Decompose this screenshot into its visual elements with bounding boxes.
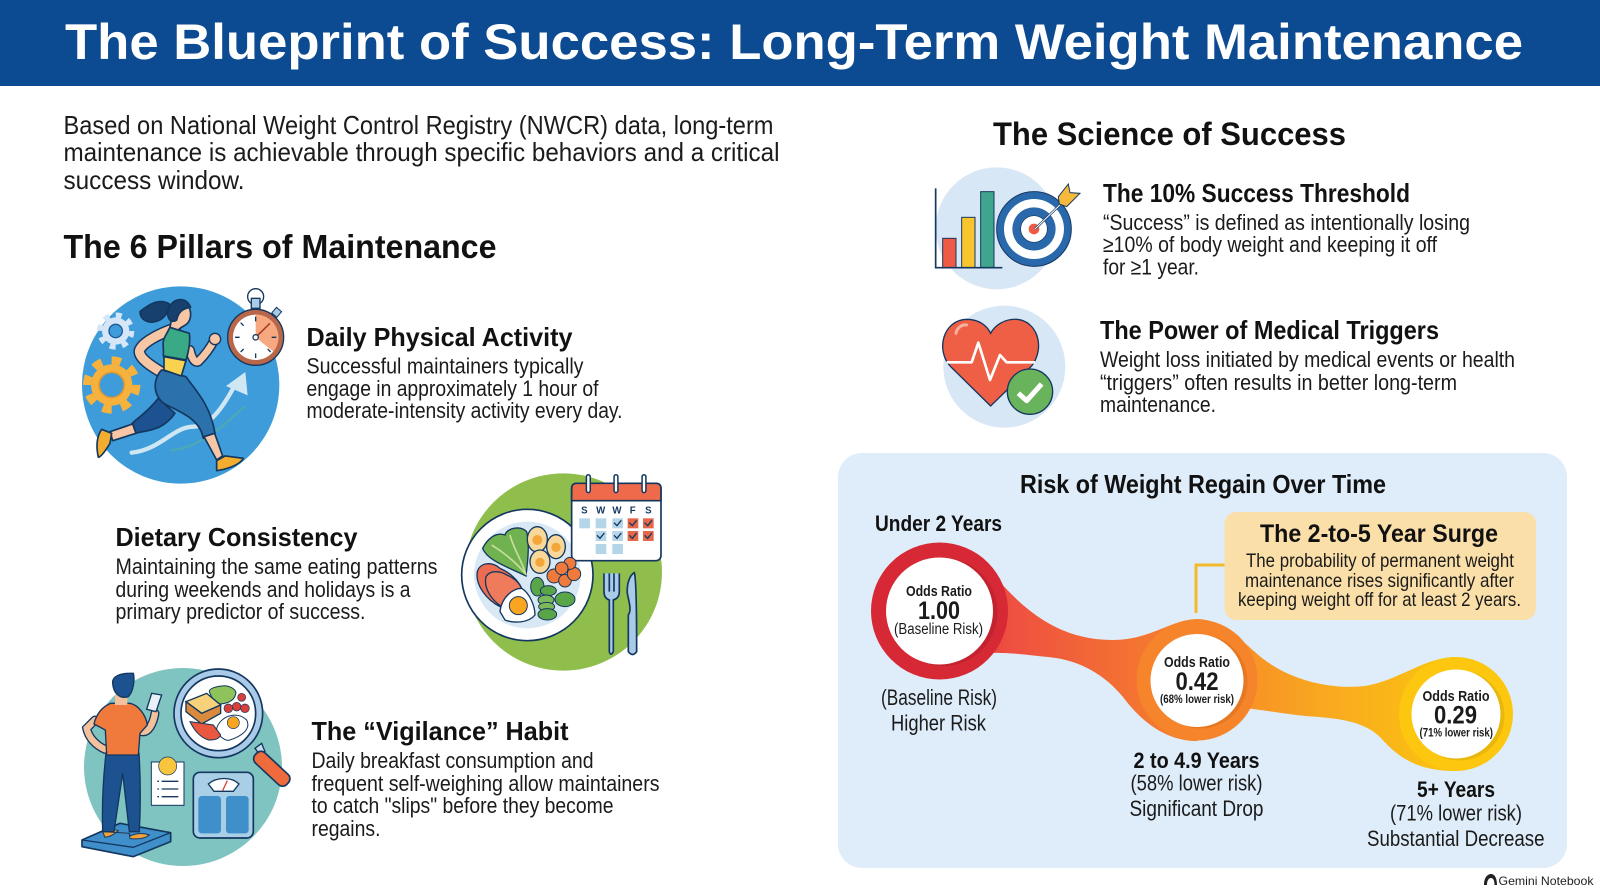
node: 2 to 4.9 years: (58% lower risk) (1130, 770, 1262, 796)
pillar: the vigilance habit (312, 716, 660, 841)
pillar: the vigilance habit: regains. (312, 816, 380, 841)
node: 5+ years: Substantial Decrease (1367, 826, 1544, 851)
heading: the science of success: The Science of Success (993, 116, 1346, 152)
node: under 2 years: (Baseline Risk) (881, 685, 997, 710)
node: under 2 years: Under 2 Years (875, 511, 1002, 536)
intro paragraph: Based on National Weight Control Registry (NWCR) data, long-term (64, 110, 774, 140)
node: 2 to 4.9 years: (68% lower risk) (1160, 692, 1234, 706)
node: 5+ years: Odds Ratio (1422, 688, 1490, 705)
icon: plate with food and calendar: F (630, 505, 636, 516)
node: 5+ years: 5+ Years (1417, 777, 1495, 802)
icons: bar chart target and heart check (936, 167, 1080, 428)
science item: 10% threshold (1103, 178, 1470, 280)
pillar: daily physical activity (306, 322, 622, 423)
icon: runner with stopwatch and gears (82, 286, 284, 484)
icon: plate with food and calendar: W (596, 505, 606, 516)
science item: 10% threshold: for ≥1 year. (1103, 254, 1199, 280)
pillar: daily physical activity: engage in approximately 1 hour of (306, 376, 599, 401)
node: 2 to 4.9 years: Significant Drop (1130, 796, 1264, 821)
callout: the 2-to-5 year surge: keeping weight off for at least 2 years. (1238, 589, 1521, 611)
ribbon chart: risk declining over time (871, 542, 1513, 771)
science item: medical triggers (1100, 315, 1515, 417)
pillar: the vigilance habit: The “Vigilance” Habit (312, 716, 569, 746)
callout: the 2-to-5 year surge: The 2-to-5 Year Surge (1260, 520, 1498, 548)
pillar: dietary consistency: Maintaining the same eating patterns (116, 554, 438, 579)
node: 5+ years: (71% lower risk) (1420, 726, 1493, 740)
node: under 2 years: Higher Risk (891, 710, 987, 736)
watermark: gemini notebook: Gemini Notebook (1498, 874, 1595, 888)
title: The Blueprint of Success: Long-Term Weight Maintenance (65, 14, 1523, 70)
node: 2 to 4.9 years: 2 to 4.9 Years (1134, 748, 1260, 773)
pillar: dietary consistency: Dietary Consistency (116, 522, 358, 552)
pillar: the vigilance habit: to catch "slips" before they become (312, 793, 614, 818)
heading: the 6 pillars: The 6 Pillars of Maintenance (64, 228, 496, 265)
intro paragraph: maintenance is achievable through specific behaviors and a critical (64, 137, 780, 167)
panel heading: Risk of Weight Regain Over Time (1020, 469, 1386, 499)
pillar: dietary consistency (116, 522, 438, 624)
node: under 2 years (875, 511, 1002, 736)
pillar: the vigilance habit: frequent self-weighing allow maintainers (312, 771, 660, 796)
node: 5+ years: 0.29 (1434, 702, 1477, 730)
node: 5+ years: (71% lower risk) (1390, 800, 1522, 826)
icon: plate with food and calendar: W (612, 505, 622, 516)
callout: the 2-to-5 year surge: The probability of permanent weight (1246, 550, 1514, 572)
node: 2 to 4.9 years: Odds Ratio (1164, 654, 1230, 671)
node: 2 to 4.9 years: 0.42 (1176, 668, 1218, 696)
pillar: dietary consistency: primary predictor of success. (116, 599, 366, 624)
science item: medical triggers: Weight loss initiated by medical events or health (1100, 347, 1515, 372)
node: under 2 years: 1.00 (918, 597, 960, 625)
icon: plate with food and calendar: S (645, 505, 652, 516)
node: 2 to 4.9 years (1130, 654, 1264, 821)
icon: plate with food and calendar (462, 473, 662, 671)
intro paragraph: success window. (64, 165, 244, 195)
node: under 2 years: (Baseline Risk) (894, 621, 983, 638)
pillar: daily physical activity: moderate-intensity activity every day. (306, 398, 622, 423)
pillar: the vigilance habit: Daily breakfast consumption and (312, 748, 594, 773)
icon: vigilance habit person, magnifier and scale (82, 668, 292, 866)
pillar: daily physical activity: Daily Physical Activity (306, 322, 573, 352)
pillar: dietary consistency: during weekends and holidays is a (116, 577, 411, 602)
pillar: daily physical activity: Successful maintainers typically (306, 354, 584, 378)
science item: 10% threshold: “Success” is defined as intentionally losing (1103, 210, 1470, 235)
science item: 10% threshold: ≥10% of body weight and keeping it off (1103, 232, 1438, 257)
science item: medical triggers: The Power of Medical Triggers (1100, 315, 1439, 345)
panel: risk of weight regain (838, 453, 1567, 868)
icon: plate with food and calendar: S (581, 505, 588, 516)
node: under 2 years: Odds Ratio (906, 583, 972, 600)
header banner (0, 0, 1600, 86)
callout: the 2-to-5 year surge (1196, 512, 1536, 620)
science item: medical triggers: “triggers” often results in better long-term (1100, 370, 1457, 395)
science item: 10% threshold: The 10% Success Threshold (1103, 178, 1410, 208)
intro paragraph (64, 110, 780, 195)
callout: the 2-to-5 year surge: maintenance rises significantly after (1245, 570, 1514, 592)
node: 5+ years (1367, 688, 1544, 851)
science item: medical triggers: maintenance. (1100, 392, 1216, 417)
